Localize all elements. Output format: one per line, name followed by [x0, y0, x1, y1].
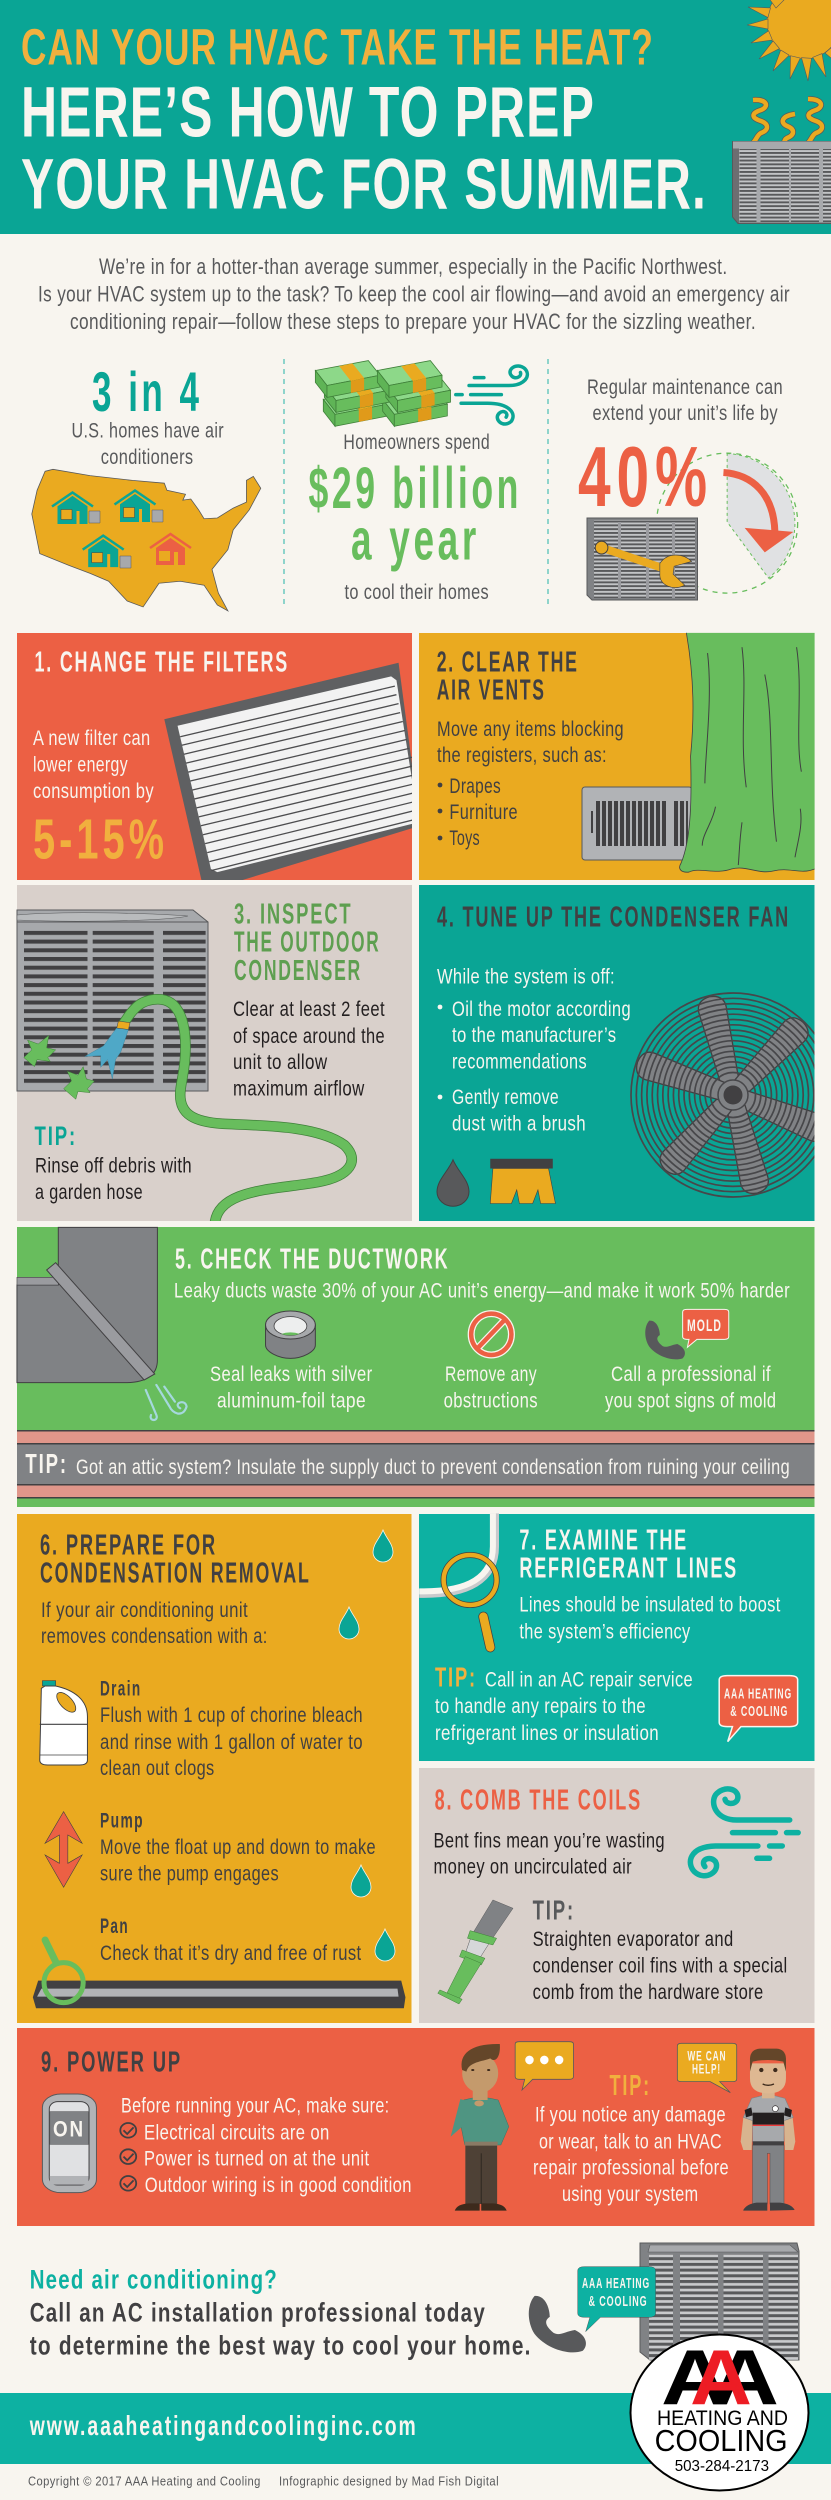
body text — [33, 726, 154, 803]
icon: gauge arrow — [657, 453, 798, 593]
icon: oil drop — [437, 1160, 469, 1206]
tip: comb from the hardware store — [533, 1980, 764, 2004]
body text — [437, 965, 631, 1135]
stat text: $29 billion — [308, 456, 522, 521]
website: www.aaaheatingandcoolinginc.com — [29, 2410, 418, 2441]
caption: Seal leaks with silver — [210, 1363, 373, 1386]
icon: floor vent — [582, 787, 692, 860]
logo — [630, 2333, 808, 2490]
icon: phone with mold bubble: MOLD — [687, 1316, 722, 1335]
stat text: a year — [351, 508, 480, 572]
stat text: to cool their homes — [344, 580, 489, 604]
heading: 6. PREPARE FOR — [40, 1529, 217, 1561]
heading: 2. CLEAR THE — [437, 647, 579, 679]
icon: wind — [456, 366, 527, 424]
body text: dust with a brush — [452, 1111, 586, 1135]
icon: US map — [32, 469, 261, 611]
figure: homeowner — [455, 2044, 509, 2211]
icon: sun — [747, 0, 831, 81]
drain text: and rinse with 1 gallon of water to — [100, 1730, 363, 1754]
panel: 6 prepare for condensation removal — [17, 1514, 412, 2023]
pump text: Move the float up and down to make — [100, 1835, 376, 1859]
heading — [40, 1529, 311, 1589]
tip: TIP: — [435, 1662, 477, 1693]
logo letters: A — [711, 2333, 779, 2421]
caption — [605, 1363, 776, 1413]
caption — [444, 1363, 538, 1413]
logo text: 503-284-2173 — [675, 2458, 769, 2475]
body text — [519, 1593, 781, 1643]
body text: recommendations — [452, 1050, 587, 1074]
tip text: using your system — [562, 2182, 698, 2206]
credits: Copyright © 2017 AAA Heating and Cooling — [28, 2475, 261, 2489]
heading: 9. POWER UP — [41, 2047, 182, 2079]
icon: foil tape — [266, 1311, 315, 1358]
panel: 5 check the ductwork — [17, 1227, 814, 1507]
checklist: Power is turned on at the unit — [144, 2147, 369, 2171]
pan text: Pan — [100, 1914, 129, 1938]
speech bubble: we can help: WE CAN — [687, 2048, 726, 2064]
credits: Infographic designed by Mad Fish Digital — [279, 2475, 499, 2489]
heading — [437, 647, 579, 707]
heading — [234, 898, 380, 987]
icon: power switch: ON — [53, 2117, 85, 2142]
checklist: Before running your AC, make sure: — [121, 2094, 390, 2118]
icon: AC unit — [732, 142, 831, 224]
panel: 1 change the filters — [17, 633, 419, 885]
logo text: HEATING AND — [657, 2407, 788, 2430]
drain text: Drain — [100, 1677, 142, 1701]
heading: CONDENSATION REMOVAL — [40, 1557, 311, 1589]
body text: A new filter can — [33, 726, 150, 750]
icon: phone — [529, 2296, 586, 2352]
body text: While the system is off: — [437, 965, 615, 989]
callout bubble: & COOLING — [588, 2294, 648, 2310]
tip: Rinse off debris with — [35, 1153, 192, 1177]
body text: Furniture — [449, 800, 518, 824]
body text: to the manufacturer’s — [452, 1023, 616, 1047]
tip — [435, 1662, 693, 1745]
caption — [210, 1363, 373, 1413]
header banner — [0, 0, 831, 234]
stat: $29 billion — [284, 359, 548, 606]
tip: TIP: — [533, 1894, 575, 1925]
icon: no sign — [471, 1314, 511, 1355]
tip: refrigerant lines or insulation — [435, 1721, 659, 1745]
body text: Drapes — [449, 774, 501, 798]
heading: THE OUTDOOR — [234, 926, 380, 958]
icon: bleach bottle — [40, 1681, 87, 1765]
body text: Gently remove — [452, 1085, 559, 1109]
tip: TIP: — [34, 1121, 77, 1151]
call to action text: to determine the best way to cool your home. — [30, 2330, 532, 2360]
icon: brush — [490, 1159, 555, 1204]
tip: to handle any repairs to the — [435, 1694, 646, 1718]
drain text: Flush with 1 cup of chorine bleach — [100, 1703, 363, 1727]
pan text — [100, 1914, 362, 1965]
stat caption — [72, 419, 224, 469]
call to action text: Call an AC installation professional today — [30, 2298, 486, 2328]
icon: houses — [52, 490, 191, 568]
tip text: If you notice any damage — [535, 2103, 726, 2127]
icon: wind — [690, 1789, 798, 1876]
tip — [533, 1894, 788, 2004]
tip: Straighten evaporator and — [533, 1927, 734, 1951]
body text — [434, 1828, 665, 1878]
stat: 40% life — [578, 375, 798, 600]
logo letters: A — [690, 2333, 752, 2421]
body text: unit to allow — [233, 1050, 328, 1074]
body text: the system’s efficiency — [519, 1619, 691, 1643]
body text: of space around the — [233, 1024, 385, 1048]
icon: money stacks — [315, 361, 450, 426]
tip text: or wear, talk to an HVAC — [539, 2129, 722, 2153]
callout bubble — [719, 1676, 798, 1742]
caption: Call a professional if — [611, 1363, 771, 1386]
icon: curtain — [680, 633, 815, 872]
body text: maximum airflow — [233, 1076, 365, 1100]
panel: 7 examine the refrigerant lines — [419, 1513, 814, 1761]
icon: air filter — [164, 663, 419, 885]
panel: 4 tune up the condenser fan — [419, 885, 831, 1221]
body text: Bent fins mean you’re wasting — [434, 1828, 665, 1852]
icon: duct with tape — [17, 1227, 187, 1420]
body text: If your air conditioning unit — [41, 1598, 248, 1622]
stat caption: conditioners — [101, 445, 194, 469]
logo letters — [661, 2333, 779, 2421]
icon: condenser fan — [631, 993, 831, 1197]
footer band — [0, 2393, 831, 2464]
logo text — [655, 2407, 788, 2475]
pump text: Pump — [100, 1809, 144, 1833]
stat caption — [587, 375, 783, 425]
heading: CONDENSER — [234, 955, 362, 987]
body text: consumption by — [33, 779, 154, 803]
stat: 3 in 4 homes — [32, 360, 261, 611]
tip: a garden hose — [35, 1180, 143, 1204]
heading: 3. INSPECT — [234, 898, 352, 930]
call to action text — [30, 2264, 532, 2360]
icon: fin comb — [438, 1900, 513, 2004]
icon: phone with mold bubble — [645, 1309, 729, 1359]
drain text — [100, 1677, 363, 1780]
tip band — [17, 1430, 814, 1498]
stat number: 40% — [578, 430, 713, 525]
pan text: Check that it’s dry and free of rust — [100, 1941, 362, 1965]
call to action text: Need air conditioning? — [30, 2264, 278, 2294]
stat text: Homeowners spend — [343, 430, 490, 454]
icon: garden hose — [85, 999, 352, 1227]
speech bubble: we can help — [677, 2043, 737, 2093]
caption: you spot signs of mold — [605, 1390, 776, 1413]
credits — [28, 2475, 499, 2489]
heading: AIR VENTS — [437, 675, 546, 707]
panel: 2 clear the air vents — [419, 633, 815, 880]
tip — [34, 1121, 192, 1204]
body text: Oil the motor according — [452, 997, 631, 1021]
caption: aluminum-foil tape — [217, 1390, 366, 1413]
icon: power switch — [42, 2094, 96, 2193]
checklist — [120, 2094, 412, 2197]
body text: removes condensation with a: — [41, 1624, 268, 1648]
callout bubble — [578, 2267, 656, 2332]
heading: 8. COMB THE COILS — [435, 1784, 642, 1816]
checklist: Electrical circuits are on — [144, 2120, 330, 2144]
body text — [437, 717, 624, 850]
pump text: sure the pump engages — [100, 1862, 279, 1886]
icon: pipe and magnifier — [419, 1513, 497, 1647]
callout bubble: AAA HEATING — [582, 2276, 650, 2292]
body text: Toys — [449, 826, 480, 850]
icon: large AC unit — [640, 2243, 799, 2360]
icon: heat waves — [753, 99, 822, 150]
speech bubble: dots — [515, 2042, 573, 2090]
stat: 5-15% — [33, 808, 168, 872]
icon: leaves — [24, 1035, 94, 1099]
caption: Remove any — [445, 1363, 537, 1386]
title: HERE’S HOW TO PREP — [21, 72, 595, 152]
icon: water drops — [339, 1530, 395, 1961]
icon: drain pan with magnifier — [33, 1940, 405, 2008]
body text: Move any items blocking — [437, 717, 624, 741]
figure: technician — [741, 2049, 795, 2211]
stat text — [308, 430, 522, 604]
body text — [41, 1598, 268, 1648]
body text — [233, 997, 385, 1100]
heading: 1. CHANGE THE FILTERS — [34, 647, 289, 679]
callout bubble: & COOLING — [730, 1704, 788, 1720]
checklist: Outdoor wiring is in good condition — [145, 2173, 412, 2197]
tip: Call in an AC repair service — [485, 1668, 693, 1692]
heading — [519, 1524, 738, 1585]
tip band: TIP: — [25, 1448, 68, 1479]
heading: 5. CHECK THE DUCTWORK — [175, 1243, 449, 1275]
heading: 7. EXAMINE THE — [519, 1524, 688, 1556]
body text: Clear at least 2 feet — [233, 997, 385, 1021]
tip text: repair professional before — [533, 2155, 729, 2179]
panel: 8 comb the coils — [419, 1768, 814, 2023]
tip text: TIP: — [610, 2070, 651, 2102]
panel: 9 power up — [17, 2028, 814, 2226]
icon: up-down arrow — [45, 1812, 82, 1887]
stat caption: extend your unit’s life by — [592, 401, 778, 425]
body text: lower energy — [33, 753, 128, 777]
pump text — [100, 1809, 376, 1886]
intro text — [38, 254, 790, 334]
title — [21, 18, 707, 224]
stat caption: U.S. homes have air — [72, 419, 224, 443]
tip text — [533, 2070, 729, 2206]
caption: obstructions — [444, 1390, 538, 1413]
icon: outdoor AC unit — [17, 910, 208, 1091]
panel: 3 inspect the outdoor condenser — [17, 885, 412, 1227]
body text: the registers, such as: — [437, 743, 607, 767]
logo letters: A — [661, 2333, 729, 2421]
logo text: COOLING — [655, 2423, 788, 2458]
body text: money on uncirculated air — [434, 1854, 632, 1878]
speech bubble: we can help: HELP! — [692, 2060, 721, 2076]
icon: AC unit with wrench — [587, 518, 698, 600]
drain text: clean out clogs — [100, 1756, 215, 1780]
stat number: 3 in 4 — [92, 360, 202, 423]
